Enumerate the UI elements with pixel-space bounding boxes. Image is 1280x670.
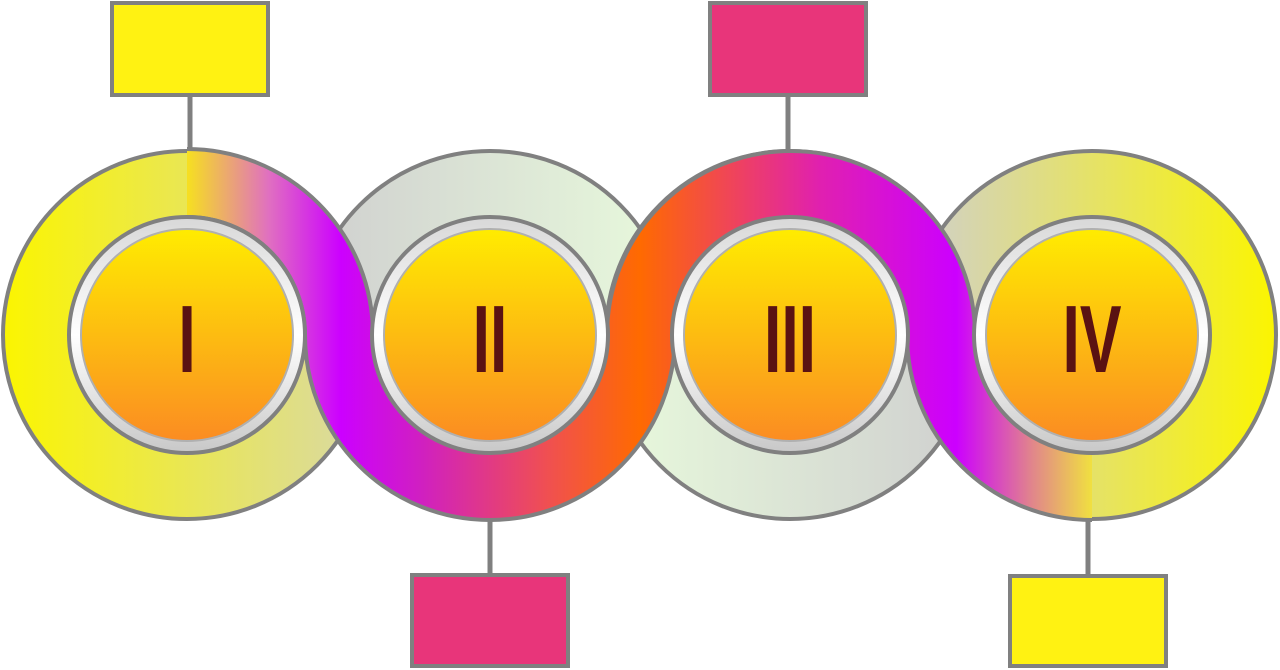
circle III: III <box>764 287 816 393</box>
circle I: I <box>178 287 196 393</box>
ring 3 <box>606 151 974 519</box>
connector lines <box>190 95 1088 576</box>
box 3 <box>412 575 568 666</box>
ring 2 <box>306 151 674 519</box>
box 2 <box>710 3 866 95</box>
circle IV: IV <box>1063 287 1121 393</box>
ring 4 <box>908 151 1276 519</box>
circle II: II <box>473 287 507 393</box>
circle II <box>372 217 608 453</box>
box 1 <box>112 3 268 95</box>
circle I <box>69 217 305 453</box>
circle III <box>672 217 908 453</box>
wave band <box>187 183 1092 486</box>
ring 1 <box>3 151 371 519</box>
circle IV <box>974 217 1210 453</box>
box 4 <box>1010 576 1166 666</box>
